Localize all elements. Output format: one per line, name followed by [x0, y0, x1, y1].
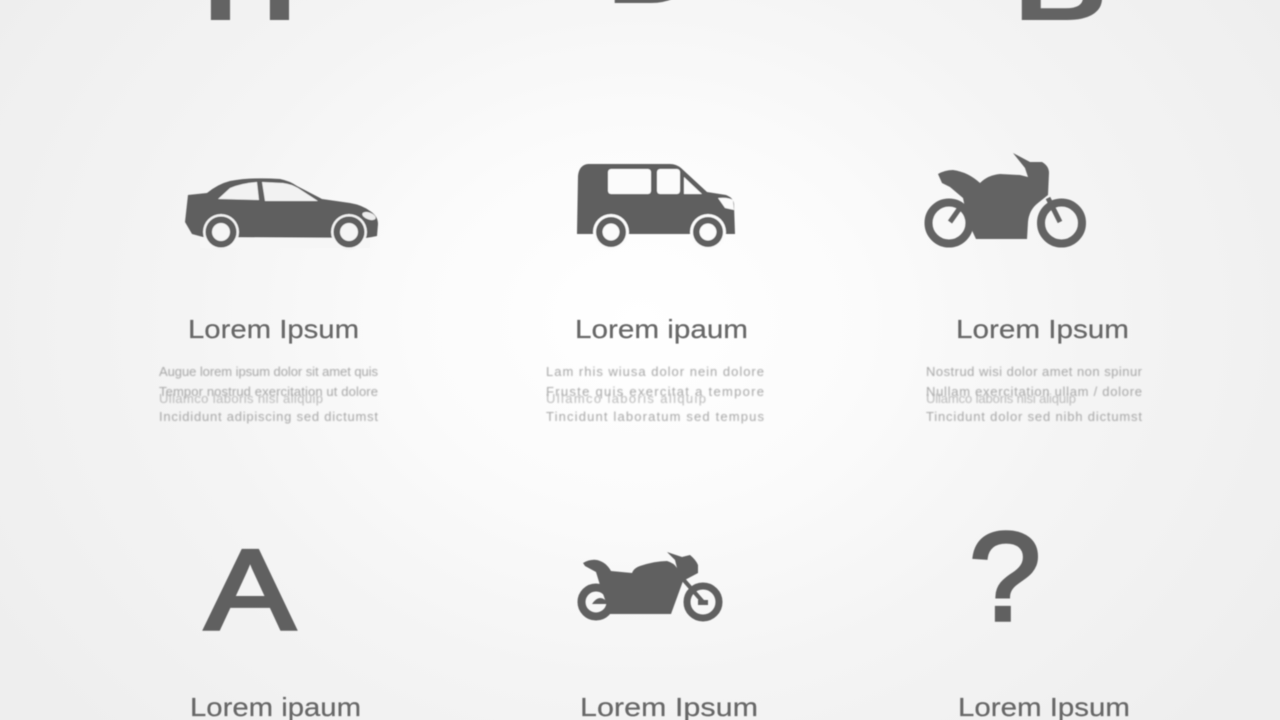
heading: column 3: Lorem Ipsum: [956, 314, 1129, 344]
icon: van: [577, 164, 735, 250]
icon: sport motorcycle: [928, 153, 1082, 244]
text block: column 3: Nostrud wisi dolor amet non spinur: [926, 364, 1143, 379]
text block: column 3: Nullam exercitation ullam / dolore: [926, 384, 1142, 399]
text block: column 1: Tempor nostrud exercitation ut dolore: [159, 384, 378, 399]
text block: column 3: Tincidunt dolor sed nibh dictumst: [926, 409, 1142, 424]
heading: column 2: Lorem ipaum: [575, 314, 748, 344]
text block: column 2: Lam rhis wiusa dolor nein dolore: [546, 364, 764, 379]
text block: column 2: Tincidunt laboratum sed tempus: [546, 409, 764, 424]
text block: column 2: Fruste quis exercitat a tempore: [546, 384, 764, 399]
letter icon: A: A: [205, 527, 295, 654]
icon: question mark: ?: [969, 506, 1041, 647]
text block: column 1: Incididunt adipiscing sed dictumst: [159, 409, 378, 424]
text block: column 1: [159, 364, 378, 424]
text block: column 1: Ullamco laboris nisi aliquip: [159, 391, 323, 406]
text block: column 1: Augue lorem ipsum dolor sit amet quis: [159, 364, 378, 379]
text block: column 3: [926, 364, 1143, 424]
heading: column 1: Lorem Ipsum: [188, 314, 359, 344]
text block: column 2: [546, 364, 764, 424]
text block: column 3: Ullamco laboris nisi aliquip: [926, 391, 1076, 406]
icon: car: [185, 178, 378, 250]
icon: cruiser motorcycle: [582, 552, 719, 618]
text block: column 2: Ullamco laboris aliquip: [546, 391, 706, 406]
